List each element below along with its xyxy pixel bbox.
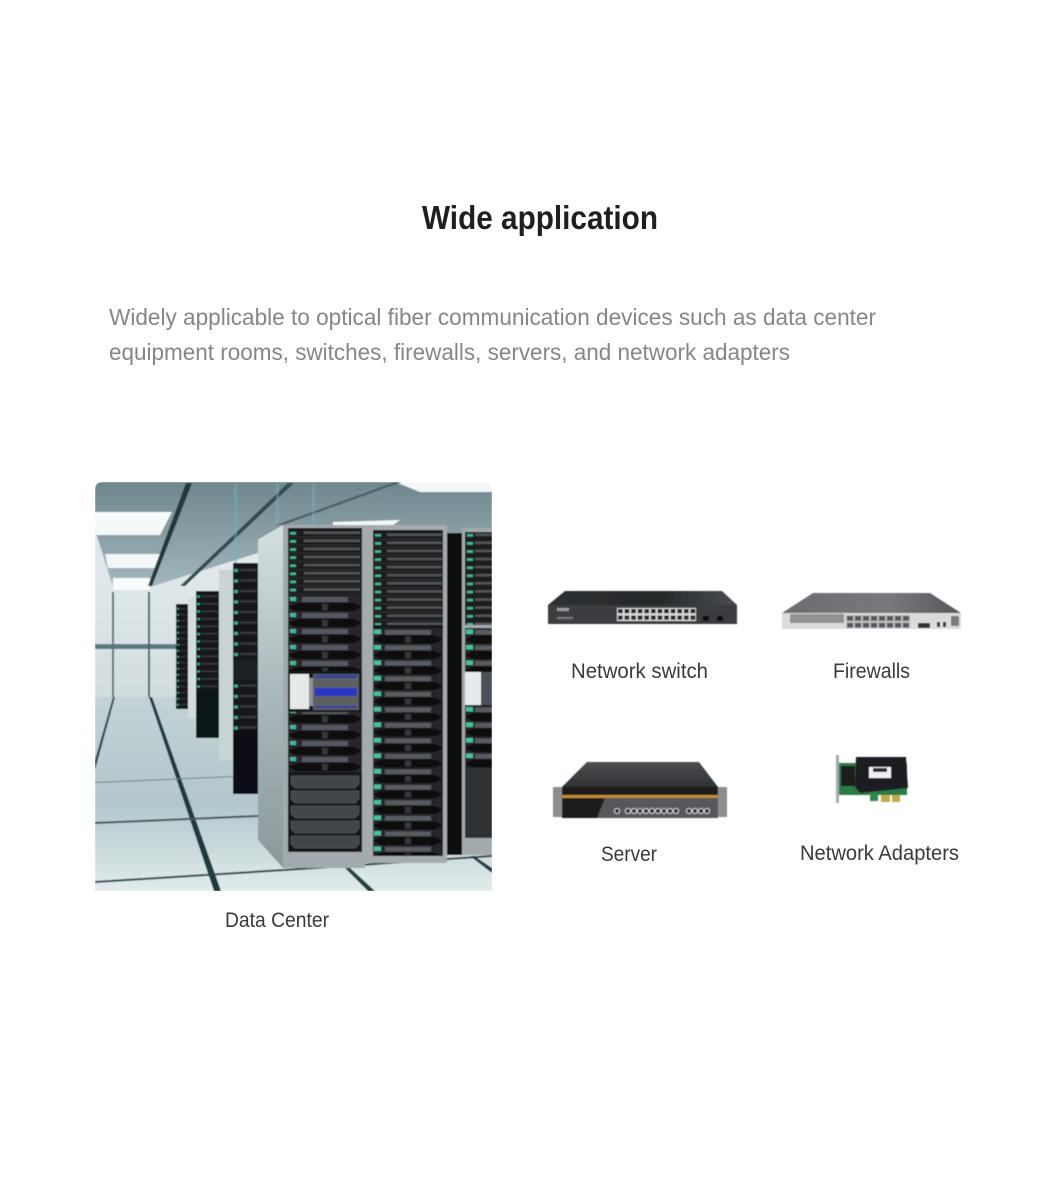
panel: data center photo (95, 482, 492, 891)
label: firewalls: Firewalls (833, 660, 910, 683)
far rack C (176, 604, 188, 709)
label: server: Server (601, 843, 657, 866)
label: network switch: Network switch (571, 660, 708, 683)
rack 3 front (462, 528, 492, 855)
far rack A (219, 563, 258, 794)
floor (95, 697, 492, 891)
icon: network adapter (836, 755, 908, 803)
description text: Widely applicable to optical fiber communication devices such as data center (109, 304, 876, 330)
label: data center: Data Center (225, 909, 329, 932)
rack gap (447, 533, 462, 855)
rack 2 front (365, 525, 447, 863)
icon: firewall (782, 593, 961, 629)
rack 1 side (258, 525, 283, 868)
icon: network switch (548, 591, 737, 624)
infographic canvas (95, 205, 962, 927)
white and blue switch unit (290, 672, 492, 710)
rack 1 front (283, 525, 365, 868)
far rack B (188, 591, 219, 738)
description text: equipment rooms, switches, firewalls, servers, and network adapters (109, 339, 790, 365)
icon: server (553, 762, 727, 818)
label: network adapters: Network Adapters (800, 842, 959, 865)
description text (109, 304, 876, 365)
title: Wide application (422, 199, 658, 236)
